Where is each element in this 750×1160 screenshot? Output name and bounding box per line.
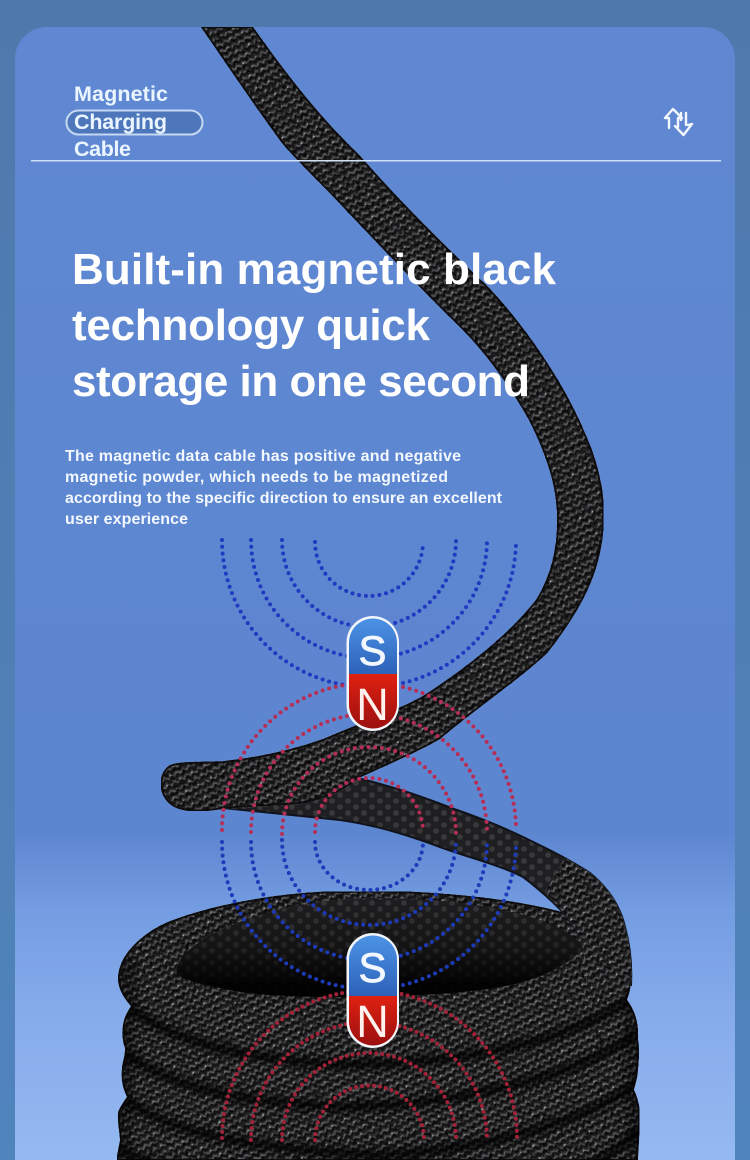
header title — [74, 82, 168, 161]
magnet: upper S/N: N — [356, 679, 389, 730]
cable: upper strand from top to blunt end — [161, 27, 603, 811]
magnetic field circles: middle red half — [222, 683, 516, 834]
headline — [72, 245, 557, 406]
header title: Magnetic — [74, 82, 168, 106]
header title: Cable — [74, 137, 131, 161]
description text: according to the specific direction to ensure an excellent — [65, 490, 503, 507]
magnetic field arcs: upper blue — [222, 540, 516, 687]
illustration: braided cable — [115, 27, 645, 1160]
description text: magnetic powder, which needs to be magnetized — [65, 469, 448, 486]
headline: storage in one second — [72, 357, 530, 406]
magnet: lower S/N: S — [358, 944, 387, 991]
cable: coil stack — [117, 892, 639, 1160]
description text — [65, 448, 503, 528]
headline: Built-in magnetic black — [72, 245, 557, 294]
magnetic field arcs: lower red — [222, 991, 517, 1140]
coil inner hollow — [177, 898, 584, 997]
icon: swap arrows — [665, 109, 692, 135]
magnetic field circles: middle blue half — [222, 840, 516, 989]
header label pill — [66, 110, 202, 134]
description text: The magnetic data cable has positive and negative — [65, 448, 461, 465]
header rule — [31, 160, 721, 162]
coil ring seams — [118, 998, 640, 1160]
cable: lower strand bright shoulder — [545, 858, 631, 1002]
magnet: lower S/N: N — [356, 996, 389, 1047]
header title: Charging — [74, 110, 167, 134]
magnet: upper S/N: S — [358, 627, 387, 674]
cable: lower strand descending into coil — [223, 778, 631, 985]
headline: technology quick — [72, 301, 431, 350]
magnet: lower S/N — [346, 933, 399, 1048]
description text: user experience — [65, 511, 188, 528]
magnet: upper S/N — [346, 616, 399, 731]
